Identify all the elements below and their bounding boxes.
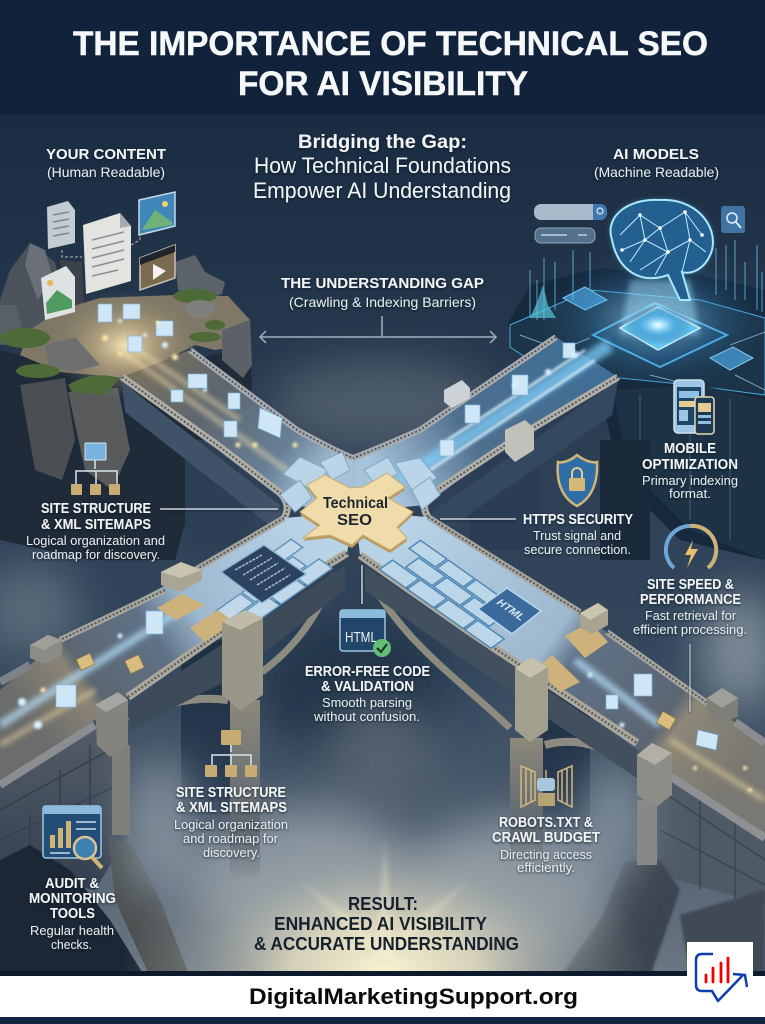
footer band: DigitalMarketingSupport.org <box>249 984 578 1009</box>
callout: robots.txt <box>492 815 600 875</box>
label: AI models <box>594 147 719 180</box>
callout: error-free code: Smooth parsing <box>322 695 412 710</box>
icon: audit dashboard <box>43 806 102 868</box>
section heading: How Technical Foundations <box>254 153 511 178</box>
arrow: understanding gap span <box>260 316 496 343</box>
golden envelopes <box>76 653 676 730</box>
callout: error-free code <box>305 565 430 724</box>
title banner <box>0 0 765 115</box>
callout: mobile optimization: format. <box>669 486 711 501</box>
callout: site structure lower: and roadmap for <box>183 831 279 846</box>
callout: site structure lower: & XML SITEMAPS <box>176 800 287 816</box>
label: the understanding gap <box>281 276 484 310</box>
bridge pylons <box>30 380 738 880</box>
icon: HTML validation <box>340 610 391 657</box>
callout: HTTPS security: secure connection. <box>524 542 631 557</box>
callout: robots.txt: CRAWL BUDGET <box>492 830 600 846</box>
title banner: FOR AI VISIBILITY <box>238 65 528 103</box>
right cliff tech platform <box>507 240 765 560</box>
callout: mobile optimization: OPTIMIZATION <box>642 457 738 473</box>
callout: error-free code: without confusion. <box>313 709 420 724</box>
label: the understanding gap: THE UNDERSTANDING GAP <box>281 276 484 292</box>
label: AI models: AI MODELS <box>613 147 699 163</box>
callout: site structure lower: discovery. <box>203 845 260 860</box>
result text: RESULT: <box>348 893 418 914</box>
callout: site structure lower: SITE STRUCTURE <box>176 785 286 801</box>
X-shaped bridge <box>0 304 765 880</box>
callout: audit tools: TOOLS <box>50 906 95 922</box>
technical SEO hub: Technical <box>323 495 388 512</box>
icon: network site map <box>71 443 120 495</box>
callout: mobile optimization: MOBILE <box>664 441 716 457</box>
callout: robots.txt: efficiently. <box>517 860 575 875</box>
callout: mobile optimization: Primary indexing <box>642 473 738 488</box>
callout: audit tools <box>29 876 116 952</box>
logo <box>687 942 753 1001</box>
HTML panel on bridge <box>478 588 541 634</box>
callout: site speed: PERFORMANCE <box>640 592 741 608</box>
icon: search bar <box>534 204 607 243</box>
bottom fog and result glow <box>120 700 650 972</box>
paving bricks: lower right <box>379 540 532 648</box>
callout: site structure lower: Logical organization <box>174 817 288 832</box>
code panel on bridge <box>221 545 306 603</box>
icon: AI brain <box>611 200 713 300</box>
callout: HTTPS security: HTTPS SECURITY <box>523 512 633 528</box>
light particles <box>18 319 752 792</box>
callout: site speed: efficient processing. <box>633 622 747 637</box>
section heading: Empower AI Understanding <box>253 178 511 203</box>
bridge arm: top-right <box>353 337 618 540</box>
icon: mobile devices <box>674 380 714 434</box>
icon: magnifier box <box>721 206 745 233</box>
callout: site structure lower <box>174 785 288 860</box>
bridge piers <box>181 440 650 890</box>
label: the understanding gap: (Crawling & Indexing Barriers) <box>289 294 476 310</box>
icon: bottom site map <box>205 730 257 777</box>
callout: audit tools: checks. <box>51 937 92 952</box>
HTML panel on bridge: HTML <box>493 598 528 623</box>
gap mist <box>0 360 765 760</box>
label: your content <box>46 147 166 180</box>
icon: HTML validation: HTML <box>345 629 377 646</box>
label: your content: YOUR CONTENT <box>46 147 166 163</box>
callout: site structure <box>26 501 278 562</box>
result text: ENHANCED AI VISIBILITY <box>274 913 488 934</box>
callout: audit tools: Regular health <box>30 923 114 938</box>
callout: site structure: roadmap for discovery. <box>32 547 160 562</box>
icon: security shield <box>558 455 597 506</box>
label: AI models: (Machine Readable) <box>594 164 719 180</box>
bridge arm: bottom-right <box>355 512 765 838</box>
right stone wall <box>560 757 765 977</box>
icon: robot gate <box>521 766 572 807</box>
callout: mobile optimization <box>642 441 738 501</box>
callout: error-free code: & VALIDATION <box>321 679 414 695</box>
callout: audit tools: MONITORING <box>29 891 116 907</box>
callout: error-free code: ERROR-FREE CODE <box>305 664 430 680</box>
section heading: Bridging the Gap: <box>298 132 467 153</box>
technical SEO hub <box>300 473 413 553</box>
data stream packets <box>56 304 718 750</box>
paving bricks: lower left <box>203 539 332 631</box>
callout: robots.txt: Directing access <box>500 847 592 862</box>
callout: site structure: SITE STRUCTURE <box>41 501 151 517</box>
callout: robots.txt: ROBOTS.TXT & <box>499 815 593 831</box>
technical SEO hub: SEO <box>337 512 372 529</box>
under-bridge arches <box>130 575 640 772</box>
callout: site structure: & XML SITEMAPS <box>41 517 151 533</box>
callout: HTTPS security: Trust signal and <box>533 528 621 543</box>
footer band <box>0 971 765 1024</box>
left cliff <box>0 243 252 560</box>
callout: site speed: Fast retrieval for <box>645 608 737 623</box>
callout: HTTPS security <box>440 512 633 557</box>
label: your content: (Human Readable) <box>47 164 165 180</box>
section heading <box>253 132 511 203</box>
callout: site speed <box>633 577 747 712</box>
callout: site structure: Logical organization and <box>26 533 165 548</box>
gold paving slabs <box>157 594 608 692</box>
result text: & ACCURATE UNDERSTANDING <box>254 933 519 954</box>
left stone wall <box>0 720 190 977</box>
title banner: THE IMPORTANCE OF TECHNICAL SEO <box>73 25 708 63</box>
callout: audit tools: AUDIT & <box>45 876 99 892</box>
bridge arm: top-left <box>120 345 355 535</box>
paving bricks: upper arms <box>280 452 440 512</box>
bridge arm: bottom-left <box>0 512 355 785</box>
result text <box>254 893 519 954</box>
callout: site speed: SITE SPEED & <box>647 577 734 593</box>
icon: your content documents <box>41 192 175 320</box>
icon: speed gauge <box>666 526 716 568</box>
